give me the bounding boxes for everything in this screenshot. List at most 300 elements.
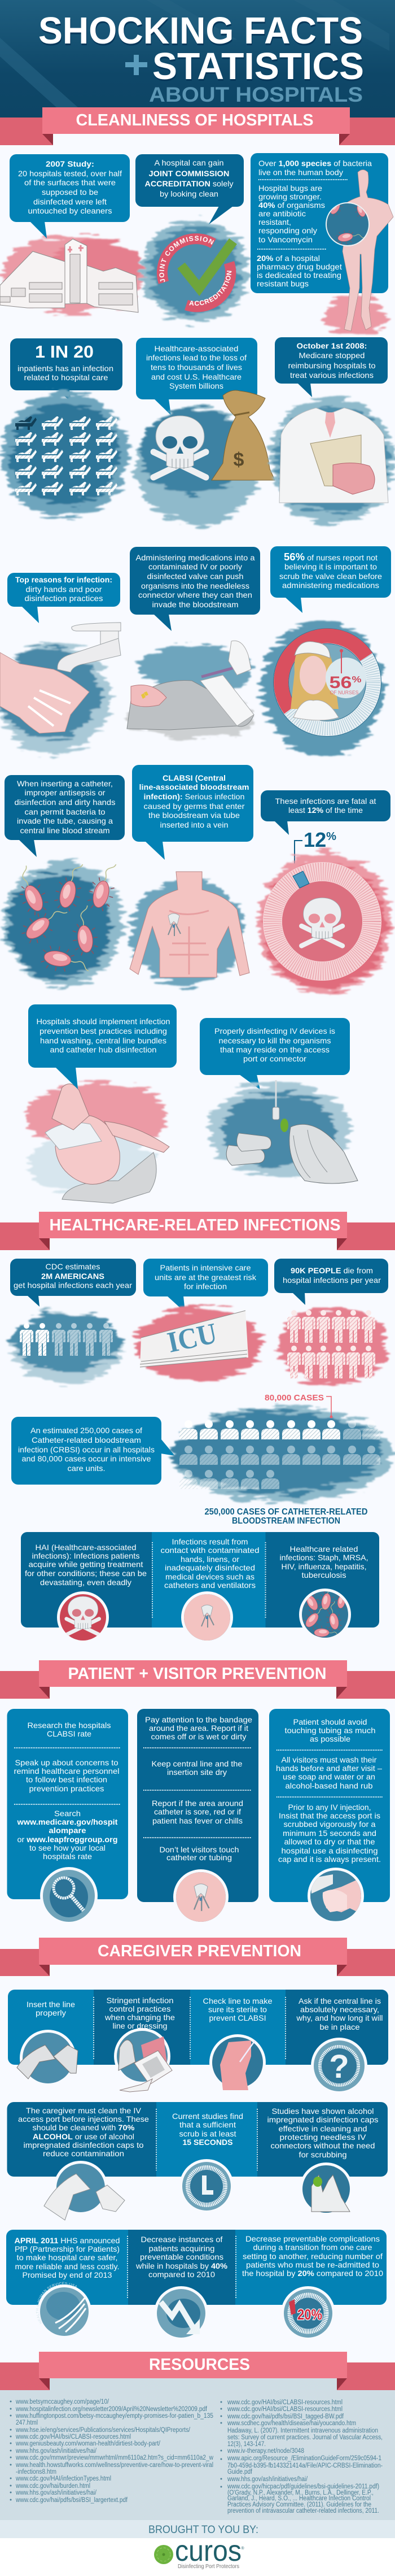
callout: bacteria species: is dedicated to treating	[257, 271, 341, 280]
callout: inserting a catheter: can permit bacteria to	[25, 807, 106, 816]
HAI definition: infections): Infections patients	[32, 1551, 139, 1560]
callout: bacteria species: 20% of a hospital	[257, 254, 320, 263]
panel: patient monitoring: catheter is sore, red or if	[154, 1807, 241, 1816]
illustration: people infected	[11, 1311, 122, 1384]
panel: visitors and hygiene: use soap and water or an	[283, 1772, 375, 1781]
panel: visitors and hygiene: scrubbed vigorously for a	[283, 1820, 376, 1829]
caps study text: connectors without the need	[271, 2141, 375, 2150]
gauge label: %	[352, 675, 361, 685]
step 3 text: Check line to make	[203, 1996, 273, 2005]
callout: CDC estimates	[10, 1259, 136, 1307]
illustration: torso with catheter	[130, 872, 249, 986]
left references: www.hospitalinfection.org/newsletter2009/April%20Newsletter%202009.pdf	[15, 2406, 208, 2413]
banner heading: RESOURCES	[149, 2356, 250, 2374]
panel: patient research: to follow best infection	[26, 1775, 107, 1784]
20 percent goal: Decrease preventable complications	[245, 2234, 380, 2243]
40 percent goal: preventable conditions	[140, 2252, 223, 2261]
panel: patient research: Speak up about concerns to	[15, 1758, 118, 1767]
callout: CLABSI definition: inserted into a vein	[160, 820, 228, 829]
40 percent goal: Decrease instances of	[141, 2235, 223, 2244]
infection sources: catheters and ventilators	[164, 1581, 256, 1590]
panel: patient monitoring: patient has fever or chills	[152, 1816, 243, 1825]
panel: visitors and hygiene	[269, 1709, 390, 1902]
panel: patient monitoring: Pay attention to the bandage	[145, 1715, 252, 1724]
panel: patient research: prevention practices	[29, 1784, 104, 1793]
callout: 250,000 CRBSI: An estimated 250,000 cases of	[30, 1426, 142, 1435]
callout: bacteria species: Over 1,000 species of bacteria	[258, 159, 372, 168]
illustration: gloved hands on IV connector	[209, 1080, 358, 1183]
illustration: hospital beds	[2, 391, 128, 518]
panel: patient monitoring: insertion site dry	[167, 1768, 227, 1777]
callout: bacteria species	[251, 153, 388, 293]
callout: infection prevention best practices: prevention best practices including	[40, 1026, 167, 1035]
right references: Garland, J., Heard, S.O., ... Healthcare Infection Control	[227, 2495, 371, 2502]
alcohol cleaning text: The caregiver must clean the IV	[26, 2106, 142, 2115]
medallion label: 20%	[297, 2306, 322, 2323]
callout: 2007 study: supposed to be	[42, 188, 98, 197]
callout: joint commission	[135, 154, 244, 224]
alcohol cleaning text: impregnated disinfection caps to	[24, 2140, 144, 2149]
right references: www.iv-therapy.net/node/3048	[227, 2448, 304, 2455]
right references: www.cdc.gov/hicpac/pdf/guidelines/bsi-guidelines-2011.pdf)	[227, 2483, 379, 2490]
callout: inserting a catheter: invade the tube, causing a	[17, 816, 113, 825]
callout: infection prevention best practices: Hospitals should implement infection	[36, 1017, 170, 1026]
HHS announcement: to make hospital care safer,	[17, 2253, 117, 2262]
alcohol cleaning text: access port before injections. These	[18, 2114, 149, 2124]
callout: medicare: treat various infections	[290, 371, 374, 380]
icon: bacteria medallion	[299, 1589, 351, 1638]
banner heading: CLEANLINESS OF HOSPITALS	[76, 111, 314, 129]
callout: CLABSI definition: caused by germs that enter	[143, 802, 245, 811]
panel: caregiver steps	[8, 1990, 388, 2065]
section banner: healthcare-related infections	[0, 1212, 395, 1250]
icon: fingers with cap medallion	[300, 2162, 353, 2216]
callout: CLABSI definition: line-associated bloodstream	[139, 782, 249, 791]
callout: 250,000 CRBSI: Catheter-related bloodstream	[32, 1435, 141, 1444]
20 percent goal: setting to another, reducing number of	[243, 2252, 383, 2261]
callout: inserting a catheter: When inserting a catheter,	[17, 779, 113, 788]
callout: 2007 study: 20 hospitals tested, over half	[18, 169, 122, 178]
right references: prevention of intravascular catheter-related infections, 2011.	[227, 2508, 379, 2514]
callout: CDC estimates: CDC estimates	[45, 1262, 100, 1271]
icon: magnifying glass	[40, 1867, 98, 1925]
left references: www.cdc.gov/HAI/infectionTypes.html	[15, 2475, 111, 2482]
infection sources: inadequately disinfected	[165, 1563, 255, 1572]
header	[0, 0, 395, 136]
callout: properly disinfecting: port or connector	[243, 1054, 306, 1063]
callout: intensive care: Patients in intensive care	[160, 1263, 251, 1272]
scrub time text: Current studies find	[172, 2112, 243, 2121]
panel: patient monitoring	[137, 1709, 258, 1902]
footer with curos logo	[0, 2535, 395, 2576]
callout: fatal twelve percent	[261, 790, 390, 835]
callout: 90K people	[274, 1259, 388, 1305]
callout: 90K people: hospital infections per year	[283, 1276, 381, 1285]
callout: joint commission: A hospital can gain	[155, 158, 223, 167]
callout: loss of lives: and cost U.S. Healthcare	[151, 372, 242, 381]
illustration: people who die	[279, 1306, 387, 1385]
callout: loss of lives: infections lead to the loss of	[146, 353, 247, 362]
illustration: bacteria	[4, 859, 122, 986]
callout: bacteria species: resistant bugs	[257, 279, 309, 288]
panel: disinfection findings	[7, 2102, 388, 2177]
scrub time text: scrub is at least	[179, 2129, 236, 2138]
right references: Practices Advisory Committee. (2011). Guidelines for the	[227, 2501, 371, 2508]
banner heading: CAREGIVER PREVENTION	[98, 1942, 301, 1960]
seal text: JOINT COMMISSION	[159, 236, 214, 282]
callout: intensive care: units are at the greatest risk	[155, 1273, 257, 1282]
section banner: cleanliness	[0, 107, 395, 145]
callout: joint commission: by looking clean	[160, 189, 218, 198]
caps study text: impregnated disinfection caps	[267, 2115, 378, 2124]
seal text lower: ACCREDITATION	[189, 271, 231, 306]
callout: inserting a catheter	[5, 775, 125, 857]
icon: gloved hand medallion	[44, 2161, 125, 2220]
callout: infection prevention best practices: hand washing, central line bundles	[40, 1036, 166, 1045]
callout: 250,000 CRBSI: and 80,000 cases occur in intensive	[21, 1454, 151, 1463]
callout: administering medications: Administering medications into a	[135, 553, 255, 562]
icon: green check	[181, 241, 233, 288]
panel: patient monitoring: comes off or is wet or dirty	[151, 1732, 246, 1741]
icon: question mark medallion	[311, 2038, 367, 2094]
right references: www.cdc.gov/HAI/bsi/CLABSI-resources.html	[227, 2406, 343, 2413]
panel: visitors and hygiene: hospital use a disinfecting	[281, 1846, 378, 1855]
panel: visitors and hygiene: hands before and after visit –	[276, 1764, 382, 1773]
callout: CDC estimates: 2M AMERICANS	[41, 1272, 104, 1281]
callout: CLABSI definition: CLABSI (Central	[163, 773, 226, 782]
callout: 2007 study: 2007 Study:	[46, 159, 94, 168]
panel: patient monitoring: Keep central line and the	[151, 1759, 243, 1768]
left references: www.cdc.gov/hai/pdfs/bsi/BSI_largertext.pdf	[15, 2497, 128, 2504]
related infections: infections: Staph, MRSA,	[280, 1553, 368, 1562]
section banner: caregiver prevention	[0, 1938, 395, 1976]
callout: 250,000 CRBSI	[11, 1417, 175, 1485]
illustration: sick patient with hand on forehead	[25, 1082, 169, 1203]
statistic: 12 percent label	[295, 828, 336, 868]
callout: 90K people: 90K PEOPLE die from	[291, 1266, 373, 1275]
infection sources: hands, linens, or	[181, 1555, 239, 1564]
right references: www.cdc.gov/hai/pdfs/bsi/BSI_tagged-BW.pdf	[227, 2413, 344, 2420]
callout: 56 percent of nurses	[270, 546, 391, 613]
left references: www.betsymccaughey.com/page/10/	[15, 2399, 109, 2405]
caps study text	[267, 2107, 378, 2159]
chart caption: BLOODSTREAM INFECTION	[232, 1516, 340, 1526]
panel: visitors and hygiene: as possible	[310, 1734, 350, 1743]
20 percent goal	[242, 2234, 383, 2278]
panel: visitors and hygiene: Prior to any IV injection,	[288, 1803, 371, 1812]
panel: visitors and hygiene: cap and it is always present.	[278, 1855, 381, 1864]
tail of prevention callout	[55, 1067, 78, 1089]
callout: properly disinfecting: that may reside on the access	[220, 1045, 330, 1054]
caps study text: for scrubbing	[299, 2150, 346, 2159]
callout: top reasons: disinfection practices	[25, 594, 103, 603]
callout: joint commission: ACCREDITATION solely	[144, 179, 234, 188]
step 2 text: Stringent infection	[106, 1996, 174, 2005]
callout: intensive care	[143, 1259, 268, 1312]
callout: medicare: reimbursing hospitals to	[288, 361, 376, 370]
callout: administering medications: disinfected valve can push	[147, 572, 244, 581]
infection sources: contact with contaminated	[160, 1546, 260, 1555]
callout: loss of lives: tens to thousands of lives	[151, 363, 242, 372]
panel: visitors and hygiene: minimum 15 seconds and	[283, 1829, 376, 1838]
callout: CLABSI definition	[132, 765, 253, 860]
left references: www.cdc.gov/HAI/bsi/CLABSI-resources.html	[15, 2434, 131, 2440]
panel: patient research: remind healthcare personnel	[14, 1766, 120, 1776]
callout: loss of lives: System billions	[169, 381, 223, 390]
illustration: joint commission accreditation seal	[137, 214, 251, 328]
callout: inserting a catheter: central line blood stream	[20, 826, 109, 835]
callout: CDC estimates: get hospital infections each year	[14, 1281, 132, 1290]
related infections	[280, 1544, 368, 1579]
callout: infection prevention best practices: and catheter hub disinfection	[50, 1045, 157, 1054]
right references: Guide.pdf	[227, 2469, 253, 2475]
callout: bacteria species: 40% of organisms	[258, 201, 325, 210]
callout: 56 percent of nurses: scrub the valve clean before	[279, 572, 382, 581]
callout: fatal twelve percent: These infections are fatal at	[275, 797, 376, 806]
scrub time text	[172, 2112, 243, 2147]
20 percent goal: patients who must be re-admitted to	[246, 2260, 379, 2269]
illustration: skull ring	[258, 853, 391, 994]
banner heading: HEALTHCARE-RELATED INFECTIONS	[50, 1216, 341, 1234]
panel: patient monitoring: around the area. Report if it	[149, 1724, 248, 1733]
right references: www.cdc.gov/HAI/bsi/CLABSI-resources.html	[227, 2399, 343, 2406]
illustration: human body with magnified bacteria	[325, 169, 393, 336]
callout: properly disinfecting: necessary to kill the organisms	[219, 1036, 331, 1045]
right references: 12(3), 143-147.	[227, 2441, 266, 2448]
callout: 2007 study: disinfected were left	[33, 197, 107, 206]
callout: loss of lives: Healthcare-associated	[155, 344, 238, 353]
callout: 1 in 20: related to hospital care	[24, 373, 108, 382]
callout: administering medications: invade the bloodstream	[152, 600, 238, 609]
left references: www.hhs.gov/ash/initiatives/hai/	[15, 2448, 97, 2455]
callout: intensive care: for infection	[184, 1282, 227, 1291]
panel: visitors and hygiene: Insist that the access port is	[279, 1811, 380, 1820]
alcohol cleaning text: reduce contamination	[43, 2149, 124, 2158]
callout: 250,000 CRBSI: infection (CRBSI) occur in all hospitals	[18, 1445, 155, 1454]
step 1 text: Insert the line	[27, 2000, 75, 2009]
step 3 text	[203, 1996, 273, 2022]
callout: properly disinfecting: Properly disinfecting IV devices is	[214, 1026, 335, 1035]
chart annotation: 80,000 cases	[265, 1393, 333, 1418]
panel: patient monitoring: Report if the area around	[152, 1799, 243, 1808]
right references: Hadaway, L. (2007). Intermittent intravenous administration	[227, 2427, 378, 2434]
callout: 2007 study: untouched by cleaners	[28, 206, 112, 215]
step 2 text: when changing the	[104, 2013, 175, 2022]
title plus sign	[125, 55, 147, 75]
step 3 text: sure its sterile to	[208, 2005, 267, 2014]
gauge label: 56	[330, 673, 348, 692]
callout: 56 percent of nurses: 56% of nurses report not	[284, 551, 378, 563]
illustration: skull and money bag: $	[234, 449, 244, 471]
callout: medicare: October 1st 2008:	[297, 341, 367, 350]
left references: www.hse.ie/eng/services/Publications/services/Hospitals/QIPreports/	[15, 2427, 191, 2434]
seal text: HEALTH & HUMAN SERVICES-USA	[36, 2282, 77, 2324]
step 3 text: prevent CLABSI	[209, 2013, 266, 2022]
icon: torso medallion	[173, 1869, 229, 1922]
HHS announcement: APRIL 2011 HHS announced	[15, 2236, 120, 2245]
icon: gloved hands medallion	[17, 2030, 78, 2086]
callout: bacteria species: pharmacy drug budget	[257, 262, 342, 271]
left references: www.hhs.gov/ash/initiatives/hai/	[15, 2490, 97, 2496]
panel: partnership for patients	[6, 2230, 387, 2305]
infection sources: medical devices such as	[165, 1572, 254, 1581]
step 4 text: why, and how long it will	[296, 2013, 383, 2022]
related infections: Healthcare related	[290, 1544, 358, 1554]
callout: medicare: Medicare stopped	[299, 351, 365, 360]
infection sources	[160, 1537, 260, 1590]
logo tagline: Disinfecting Port Protectors	[178, 2564, 239, 2570]
icon: dressing medallion	[114, 2028, 172, 2092]
alcohol cleaning text: should be cleaned with 70%	[33, 2123, 135, 2132]
illustration: hospital building	[0, 234, 144, 314]
step 4 text	[296, 1996, 383, 2031]
caps study text: protecting needless IV	[280, 2133, 366, 2142]
magnified bacteria lens	[326, 202, 370, 246]
callout: bacteria species: are antibiotic	[258, 209, 306, 218]
right references: www.scdhec.gov/health/disease/hai/youcando.htm	[227, 2420, 356, 2427]
callout: bacteria species: responding only	[258, 226, 317, 235]
illustration: cleaning IV on patient arm	[127, 641, 254, 739]
HAI definition: for other conditions; these can be	[25, 1569, 147, 1578]
infection sources: Infections result from	[172, 1537, 248, 1546]
step 4 text: absolutely necessary,	[300, 2005, 379, 2014]
sponsor band: BROUGHT TO YOU BY:	[148, 2524, 258, 2536]
step 1 text	[27, 2000, 75, 2017]
callout: administering medications: connector where they can then	[138, 590, 252, 599]
callout: 1 in 20: 1 IN 20	[35, 342, 94, 362]
banner heading: PATIENT + VISITOR PREVENTION	[68, 1665, 326, 1683]
callout: 1 in 20: inpatients has an infection	[17, 364, 113, 373]
statistic: 12 percent label: %	[326, 830, 336, 843]
HHS announcement	[15, 2236, 120, 2279]
callout: bacteria species: to Vancomycin	[258, 235, 313, 244]
statistic: 12 percent label: 12	[304, 828, 326, 851]
icon: torso medallion	[181, 1591, 233, 1641]
panel: HAI facts	[21, 1532, 379, 1628]
panel: patient research: to see how your local	[29, 1843, 106, 1852]
logo registered mark: ®	[241, 2546, 244, 2551]
callout: bacteria species: growing stronger.	[258, 192, 322, 201]
illustration: nurse gauge 56 percent	[262, 620, 384, 756]
chart: 250,000 cases pictogram	[172, 1407, 392, 1503]
panel: patient research: hospitals rate	[43, 1852, 92, 1861]
panel: resources list	[0, 2390, 395, 2520]
40 percent goal: patients acquiring	[149, 2244, 214, 2253]
left references	[10, 2399, 214, 2504]
callout: CLABSI definition: infection): Serious infection	[143, 792, 245, 801]
icon: skull medallion	[57, 1591, 109, 1643]
callout: 250,000 CRBSI: care units.	[68, 1464, 105, 1473]
step 2 text	[104, 1996, 175, 2030]
left references: www.health.howstuffworks.com/wellness/preventive-care/how-to-prevent-viral	[15, 2462, 213, 2469]
HAI definition	[25, 1543, 147, 1587]
panel: patient research: Research the hospitals	[27, 1721, 111, 1730]
icon: hand washing medallion	[308, 1868, 364, 1924]
callout: top reasons: dirty hands and poor	[26, 585, 102, 594]
callout: joint commission: JOINT COMMISSION	[149, 169, 229, 178]
callout: infection prevention best practices	[28, 1004, 177, 1068]
40 percent goal: while in hospitals by 40%	[135, 2261, 228, 2270]
panel: patient monitoring: Don’t let visitors touch	[159, 1845, 239, 1854]
left references: -infections8.htm	[16, 2469, 56, 2475]
callout: 2007 study	[10, 154, 130, 238]
illustration: skull and money bag	[135, 390, 275, 525]
callout: 56 percent of nurses: administering medications	[282, 581, 379, 590]
alcohol cleaning text	[18, 2106, 149, 2158]
logo wordmark: curos	[175, 2535, 242, 2568]
scrub time text: 15 SECONDS	[183, 2138, 232, 2147]
step 4 text: Ask if the central line is	[299, 1996, 381, 2005]
HHS announcement: Promised by end of 2013	[23, 2270, 112, 2279]
left references: 247.html	[16, 2420, 38, 2426]
callout: bacteria species: Hospital bugs are	[258, 184, 322, 193]
illustration: ICU sign	[135, 1308, 262, 1381]
panel: patient monitoring: catheter or tubing	[166, 1853, 232, 1862]
title line 3: ABOUT HOSPITALS	[149, 83, 363, 106]
callout: administering medications: organisms into the needleless	[141, 581, 249, 590]
panel: patient research: CLABSI rate	[47, 1729, 91, 1738]
alcohol cleaning text: ALCOHOL or use of alcohol	[33, 2132, 134, 2141]
callout: top reasons: Top reasons for infection:	[15, 575, 112, 584]
callout: inserting a catheter: disinfection and dirty hands	[15, 798, 115, 807]
panel: visitors and hygiene: Patient should avoid	[293, 1717, 367, 1726]
panel: visitors and hygiene: touching tubing as much	[284, 1726, 376, 1735]
scrub time text: that a sufficient	[179, 2120, 236, 2129]
step 4 text: be in place	[319, 2022, 360, 2031]
left references: www.huffingtonpost.com/betsy-mccaughey/empty-promises-for-patien_b_135	[15, 2413, 213, 2420]
left references: www.cdc.gov/hai/burden.html	[15, 2483, 90, 2490]
icon: sterile swab medallion	[209, 2034, 266, 2091]
panel: patient research: Search	[54, 1809, 81, 1818]
callout: 2007 study: of the surfaces that were	[24, 178, 116, 187]
question glyph: ?	[329, 2048, 349, 2085]
icon: logo cap	[154, 2545, 173, 2564]
panel: patient research: or www.leapfroggroup.org	[17, 1835, 117, 1844]
callout: CLABSI definition: the bloodstream via tube	[148, 811, 240, 820]
panel: visitors and hygiene: allowed to dry or that the	[284, 1837, 375, 1846]
left references: www.geniusbeauty.com/woman-health/dirtiest-body-part/	[15, 2440, 161, 2447]
callout: fatal twelve percent: least 12% of the time	[288, 806, 363, 815]
right references	[220, 2399, 383, 2514]
callout: 56 percent of nurses: believing it is important to	[284, 562, 377, 571]
HHS announcement: PfP (Partnership for Patients)	[15, 2244, 120, 2253]
20 percent goal: the hospital by 20% compared to 2010	[242, 2269, 383, 2278]
illustration: doctor holding money	[271, 397, 395, 524]
section banner: resources	[0, 2352, 395, 2390]
icon: clock medallion	[179, 2159, 234, 2213]
panel: patient research: alompare	[49, 1826, 86, 1835]
chart caption: 250,000 CASES OF CATHETER-RELATED	[204, 1507, 368, 1517]
callout: medicare	[275, 337, 388, 397]
section banner: patient + visitor prevention	[0, 1660, 395, 1699]
gauge caption: OF NURSES	[330, 690, 359, 696]
callout: top reasons	[7, 573, 120, 623]
sponsor band	[0, 2520, 395, 2538]
related infections: tuberculosis	[301, 1570, 346, 1579]
caps study text: Studies have shown alcohol	[272, 2107, 374, 2116]
left references: www.cdc.gov/mmwr/preview/mmwrhtml/mm6110a2.htm?s_cid=mm6110a2_w	[15, 2455, 214, 2461]
right references: (O'Grady, N.P., Alexander, M., Burns, L.A., Dellinger, E.P.,	[227, 2490, 374, 2496]
chart annotation: 80,000 cases: 80,000 CASES	[265, 1393, 324, 1403]
40 percent goal: compared to 2010	[148, 2270, 215, 2279]
icon: down arrow medallion	[154, 2286, 208, 2340]
icon: money bag	[212, 390, 275, 480]
panel: patient research: www.medicare.gov/hospit	[16, 1817, 118, 1826]
chart caption	[204, 1507, 368, 1526]
step 2 text: control practices	[109, 2004, 170, 2013]
related infections: HIV, influenza, hepatitis,	[281, 1562, 367, 1571]
callout: administering medications	[130, 547, 260, 631]
